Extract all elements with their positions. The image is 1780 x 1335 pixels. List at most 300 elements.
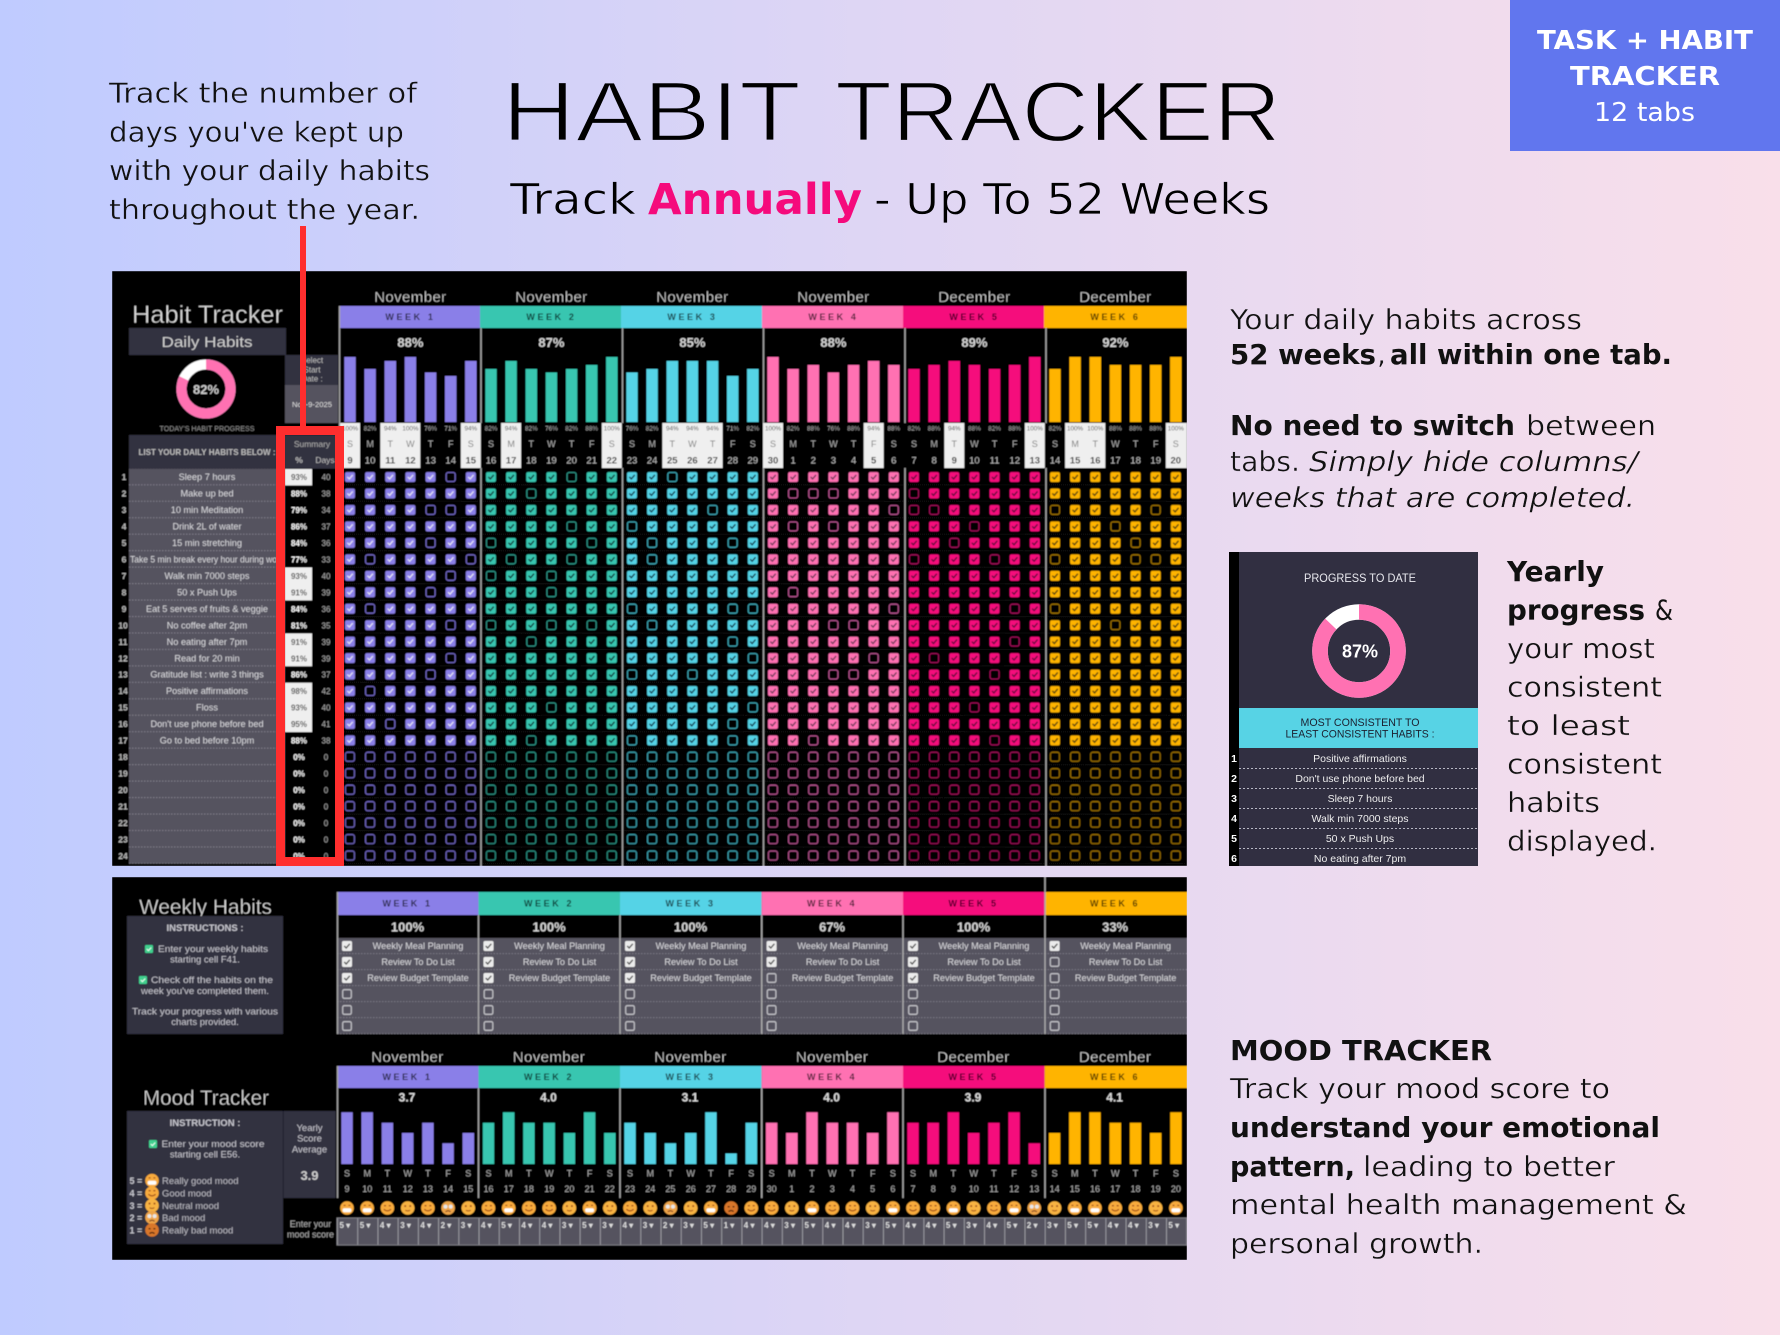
text block: no need to switch: weeks that are completed. bbox=[1230, 481, 1635, 514]
mood: week 2: 3 ▾ bbox=[602, 1221, 614, 1230]
week 3 column: 94% bbox=[686, 426, 699, 432]
badge: task + habit tracker: TRACKER bbox=[1570, 62, 1720, 92]
summary column: percent and days: 88% bbox=[291, 490, 307, 499]
weekly habits: week 5: WEEK 5 bbox=[948, 898, 999, 908]
mood: week 2: 18 bbox=[524, 1184, 534, 1194]
mood: week 1: 3 ▾ bbox=[400, 1221, 412, 1230]
week 2 column: 18 bbox=[526, 456, 537, 466]
weekly habits: week 5: Review To Do List bbox=[947, 957, 1021, 967]
instructions box: mood legend: Really good mood bbox=[162, 1176, 239, 1187]
mood: week 3: W bbox=[686, 1168, 695, 1178]
mood: week 3: T bbox=[708, 1168, 714, 1178]
week 1 column: S bbox=[347, 439, 353, 449]
ranked habit list: 6 bbox=[1231, 853, 1237, 865]
mood: week 6: 3 ▾ bbox=[1148, 1221, 1160, 1230]
summary column: percent and days: 36 bbox=[322, 605, 331, 614]
mood: week 2: 3 ▾ bbox=[562, 1221, 574, 1230]
text block: yearly progress: displayed. bbox=[1507, 824, 1657, 858]
week 4 column: 30 bbox=[768, 456, 778, 466]
habit name rows: 13 bbox=[118, 670, 128, 680]
weekly habits: week 3 bbox=[620, 892, 762, 1034]
panel: progress to date bbox=[1229, 552, 1478, 866]
summary column: percent and days: 86% bbox=[291, 671, 307, 680]
panel: weekly habits and mood tracker screenshot bbox=[112, 877, 1187, 1260]
week 4 column: 4 bbox=[851, 456, 856, 466]
week 2 column: 82% bbox=[565, 426, 578, 432]
week 3 column bbox=[621, 289, 763, 864]
summary header bbox=[285, 435, 338, 469]
mood: week 5: 8 bbox=[931, 1184, 936, 1194]
mood: week 4: F bbox=[870, 1168, 876, 1178]
yearly score average: Average bbox=[292, 1144, 327, 1156]
week 5 column: 88% bbox=[1008, 426, 1021, 432]
text block: mood tracker: understand your emotional bbox=[1230, 1111, 1660, 1144]
week 5 column: 89% bbox=[961, 335, 988, 350]
week 5 column: T bbox=[992, 439, 998, 449]
habit name rows: 14 bbox=[118, 686, 128, 696]
summary column: percent and days: 38 bbox=[322, 737, 331, 746]
mood: week 2: T bbox=[526, 1168, 532, 1178]
week 6 column: 14 bbox=[1050, 456, 1060, 466]
text block: 52 weeks: 52 weeks bbox=[1230, 338, 1376, 371]
week 1 column: 12 bbox=[405, 456, 416, 466]
mood: week 4: 4 ▾ bbox=[764, 1221, 776, 1230]
mood: week 2: S bbox=[485, 1168, 492, 1178]
weekly habits: week 5: Weekly Meal Planning bbox=[939, 941, 1029, 951]
text block: mood tracker: leading to better bbox=[1363, 1150, 1616, 1183]
mood: week 3: S bbox=[627, 1168, 633, 1178]
week 4 column: 76% bbox=[827, 426, 840, 432]
week 2 column: 94% bbox=[505, 426, 518, 432]
week 3 column: T bbox=[670, 439, 676, 449]
week 4 column: S bbox=[891, 439, 897, 449]
mood: week 1: 2 ▾ bbox=[441, 1221, 452, 1230]
week 3 column: November bbox=[656, 289, 729, 306]
donut: 87% bbox=[1320, 612, 1398, 690]
habit name rows: Gratitude list : write 3 things bbox=[150, 670, 264, 680]
summary column: percent and days: 88% bbox=[291, 737, 307, 746]
week 3 column: WEEK 3 bbox=[667, 312, 717, 322]
mood: week 6: S bbox=[1052, 1168, 1058, 1178]
callout: top left note: with your daily habits bbox=[109, 154, 430, 187]
week 2 column: 20 bbox=[566, 456, 577, 466]
week 2 column: T bbox=[569, 439, 575, 449]
mood: week 5: 5 ▾ bbox=[1007, 1221, 1018, 1230]
mood: week 1: 4 ▾ bbox=[420, 1221, 432, 1230]
week 1 column bbox=[339, 289, 481, 864]
weekly habits: week 1: Weekly Meal Planning bbox=[373, 941, 463, 951]
mood: week 1: 10 bbox=[362, 1184, 372, 1194]
ranked habit list: 1 bbox=[1231, 753, 1237, 765]
text block: mood tracker: mental health management & bbox=[1230, 1188, 1687, 1221]
mood: week 1: W bbox=[403, 1168, 412, 1178]
mood: week 3: S bbox=[748, 1168, 754, 1178]
weekly habits: week 6: 33% bbox=[1102, 920, 1129, 934]
weekly habits: week 3: Review Budget Template bbox=[650, 973, 752, 983]
weekly habits: week 2: WEEK 2 bbox=[524, 898, 574, 908]
text block: 52 weeks: all within one tab. bbox=[1390, 338, 1672, 371]
mood: week 3: T bbox=[668, 1168, 674, 1178]
week 3 column: 76% bbox=[626, 426, 639, 432]
week 4 column: 1 bbox=[790, 456, 796, 466]
habit name rows: 20 bbox=[118, 785, 128, 795]
week 4 column: F bbox=[871, 439, 877, 449]
mood: week 6: 5 ▾ bbox=[1067, 1221, 1079, 1230]
week 2 column: W bbox=[547, 439, 556, 449]
mood: week 6: T bbox=[1133, 1168, 1139, 1178]
yearly score average: mood score bbox=[287, 1230, 334, 1240]
week 6 column: 88% bbox=[1149, 426, 1162, 432]
mood: week 2: 21 bbox=[585, 1184, 595, 1194]
weekly habits: week 6: Weekly Meal Planning bbox=[1080, 941, 1171, 951]
subtitle bbox=[509, 175, 1270, 225]
week 6 column: 92% bbox=[1102, 335, 1129, 350]
ranked habit list bbox=[1231, 753, 1478, 865]
week 6 column bbox=[1044, 289, 1187, 864]
week 6 column: F bbox=[1153, 439, 1159, 449]
donut: 87%: 87% bbox=[1342, 642, 1378, 662]
mood: week 1: 4 ▾ bbox=[380, 1221, 392, 1230]
week 2 column: November bbox=[515, 289, 588, 306]
week 4 column: 2 bbox=[811, 456, 816, 466]
ranked habit list: 2 bbox=[1231, 773, 1237, 785]
summary column: percent and days: 95% bbox=[291, 720, 307, 729]
week 3 column: 24 bbox=[647, 456, 657, 466]
week 6 column: T bbox=[1093, 439, 1099, 449]
week 6 column: M bbox=[1071, 439, 1079, 449]
mood: week 5: 10 bbox=[969, 1184, 979, 1194]
ranked habit list: 4 bbox=[1231, 813, 1237, 825]
weekly habits: week 1: Review To Do List bbox=[381, 957, 455, 967]
week 1 column: W bbox=[406, 439, 415, 449]
mood: week 1 bbox=[337, 1049, 478, 1230]
mood: week 4: S bbox=[769, 1168, 775, 1178]
habit name rows: Don't use phone before bed bbox=[150, 719, 264, 729]
start date selector: Date : bbox=[301, 374, 323, 384]
mood: week 1: 9 bbox=[344, 1184, 350, 1194]
week 3 column: 27 bbox=[707, 456, 718, 466]
text block: yearly progress: habits bbox=[1507, 786, 1600, 819]
week 1 column: 10 bbox=[365, 456, 375, 466]
instructions box: weekly: starting cell F41. bbox=[170, 954, 240, 966]
mood: week 5: 5 ▾ bbox=[946, 1221, 958, 1230]
mood: week 6: 4 ▾ bbox=[1108, 1221, 1119, 1230]
week 5 column: 82% bbox=[908, 426, 921, 432]
mood: week 2: 16 bbox=[483, 1184, 494, 1194]
week 5 column: 94% bbox=[948, 426, 961, 432]
mood: week 5: 2 ▾ bbox=[1027, 1221, 1038, 1230]
habit name rows: 1 bbox=[122, 472, 127, 482]
week 6 column: S bbox=[1173, 439, 1179, 449]
mood: week 1: 5 ▾ bbox=[340, 1221, 351, 1230]
week 4 column: S bbox=[770, 439, 776, 449]
week 1 column: November bbox=[374, 289, 447, 306]
ranked habit list: Don't use phone before bed bbox=[1295, 773, 1425, 785]
mood: week 6: 19 bbox=[1151, 1184, 1161, 1194]
summary column: percent and days: 40 bbox=[322, 473, 331, 482]
mood: week 5: S bbox=[1031, 1168, 1037, 1178]
habit name rows: Walk min 7000 steps bbox=[165, 571, 250, 581]
week 4 column: 94% bbox=[867, 426, 880, 432]
weekly habits: week 6: Review Budget Template bbox=[1075, 973, 1176, 983]
mood: week 5: W bbox=[969, 1168, 978, 1178]
mood: week 4: 4.0 bbox=[823, 1090, 840, 1104]
summary column: percent and days: 38 bbox=[322, 490, 331, 499]
week 1 column: 100% bbox=[342, 426, 358, 432]
week 5 column: 88% bbox=[928, 426, 941, 432]
yearly score average: 3.9 bbox=[300, 1168, 319, 1183]
mood: week 5: 11 bbox=[989, 1184, 999, 1194]
start date selector: Nov-9-2025 bbox=[292, 400, 332, 409]
mood: week 4: 4 ▾ bbox=[825, 1221, 836, 1230]
mood: week 2: F bbox=[587, 1168, 593, 1178]
summary column: percent and days: 35 bbox=[322, 621, 331, 630]
week 1 column: WEEK 1 bbox=[385, 312, 435, 322]
week 5 column: 10 bbox=[969, 456, 980, 466]
summary column: percent and days: 0 bbox=[324, 753, 329, 762]
mood: week 1: 13 bbox=[423, 1184, 433, 1194]
week 3 column: 82% bbox=[746, 426, 759, 432]
weekly habits: week 4 bbox=[762, 892, 903, 1034]
summary column: percent and days: 0 bbox=[324, 852, 329, 861]
habit name rows: Read for 20 min bbox=[174, 653, 240, 663]
mood dropdown row bbox=[337, 1218, 1187, 1245]
mood: week 5: F bbox=[1011, 1168, 1017, 1178]
week 1 column: 13 bbox=[425, 456, 436, 466]
habit name rows: 7 bbox=[122, 571, 127, 581]
mood: week 1: 15 bbox=[463, 1184, 473, 1194]
summary column: percent and days: 81% bbox=[291, 621, 307, 630]
summary column: percent and days: 0% bbox=[293, 753, 305, 762]
habit name rows: 21 bbox=[118, 801, 128, 811]
week 4 column: W bbox=[829, 439, 838, 449]
summary header: Days bbox=[315, 455, 335, 465]
mood: week 6: 4.1 bbox=[1106, 1090, 1123, 1104]
weekly habits: week 2 bbox=[478, 892, 620, 1034]
text block: 52 weeks bbox=[1229, 303, 1672, 371]
donut: today's habit progress 82%: TODAY'S HABIT PROGRESS bbox=[160, 426, 255, 433]
heading: habit tracker: Habit Tracker bbox=[132, 301, 283, 329]
instructions box: mood legend: Enter your mood score bbox=[162, 1139, 264, 1150]
habit name rows: 9 bbox=[122, 604, 127, 614]
mood: week 3: 3 ▾ bbox=[643, 1221, 654, 1230]
week 1 column: 76% bbox=[424, 426, 437, 432]
weekly habits: week 4: Review Budget Template bbox=[792, 973, 893, 983]
text block: yearly progress: to least bbox=[1507, 709, 1630, 742]
mood: week 3: 4 ▾ bbox=[744, 1221, 755, 1230]
week 4 column: 3 bbox=[831, 456, 836, 466]
mood: week 2: 4 ▾ bbox=[481, 1221, 493, 1230]
instructions box: mood legend: starting cell E56. bbox=[170, 1150, 240, 1160]
mood: week 2: M bbox=[505, 1168, 512, 1178]
week 3 column: S bbox=[629, 439, 635, 449]
weekly habits: week 2: Weekly Meal Planning bbox=[514, 941, 605, 951]
summary column: percent and days: 84% bbox=[291, 539, 307, 548]
week 1 column: M bbox=[366, 439, 374, 449]
week 2 column: 16 bbox=[486, 456, 496, 466]
mood: week 2: T bbox=[567, 1168, 573, 1178]
title: TRACKER bbox=[835, 65, 1281, 160]
week 2 column: WEEK 2 bbox=[526, 312, 576, 322]
week 5 column: F bbox=[1012, 439, 1018, 449]
habit name rows: 10 bbox=[118, 620, 128, 630]
mood: week 2 bbox=[478, 1049, 620, 1230]
mood: week 3: 25 bbox=[665, 1184, 675, 1194]
mood: week 3: 27 bbox=[706, 1184, 716, 1194]
mood: week 6: T bbox=[1092, 1168, 1098, 1178]
instructions box: weekly: charts provided. bbox=[171, 1017, 239, 1028]
week 1 column: 11 bbox=[385, 456, 396, 466]
subtitle: - Up To 52 Weeks bbox=[874, 175, 1270, 225]
heading: daily habits bbox=[129, 328, 286, 355]
mood: week 3: 3 ▾ bbox=[683, 1221, 695, 1230]
text block: 52 weeks: , bbox=[1377, 338, 1386, 371]
mood: week 5: T bbox=[991, 1168, 997, 1178]
week 1 column: T bbox=[428, 439, 434, 449]
callout: top left note: Track the number of bbox=[108, 77, 418, 110]
title: HABIT bbox=[502, 65, 801, 160]
mood: week 4: T bbox=[809, 1168, 815, 1178]
text block: 52 weeks: Your daily habits across bbox=[1229, 303, 1582, 336]
heading: mood tracker: Mood Tracker bbox=[143, 1087, 269, 1110]
week 6 column: December bbox=[1079, 289, 1152, 306]
mood: week 1: T bbox=[425, 1168, 431, 1178]
week 5 column: 7 bbox=[911, 456, 917, 466]
instructions box: mood legend: 3 = bbox=[130, 1201, 142, 1211]
donut: today's habit progress 82%: 82% bbox=[193, 382, 219, 397]
week 2 column: 87% bbox=[538, 335, 565, 350]
mood: week 2: 4 ▾ bbox=[521, 1221, 533, 1230]
mood: week 1: November bbox=[371, 1049, 444, 1066]
week 6 column: W bbox=[1111, 439, 1120, 449]
mood: week 4: M bbox=[788, 1168, 796, 1178]
mood: week 5 bbox=[903, 1049, 1044, 1230]
mood: week 2: 5 ▾ bbox=[501, 1221, 513, 1230]
mood: week 5: 4 ▾ bbox=[906, 1221, 917, 1230]
week 6 column: 20 bbox=[1171, 456, 1181, 466]
instructions box: mood legend: Good mood bbox=[162, 1188, 212, 1200]
weekly habits: week 4: Weekly Meal Planning bbox=[797, 941, 888, 951]
habit name rows bbox=[118, 469, 285, 864]
week 1 column: 14 bbox=[445, 456, 456, 466]
mood: week 6: 20 bbox=[1171, 1184, 1181, 1194]
week 5 column: 8 bbox=[931, 456, 937, 466]
habit name rows: Go to bed before 10pm bbox=[160, 736, 255, 746]
weekly habits: week 6: WEEK 6 bbox=[1090, 898, 1140, 908]
mood: week 5: December bbox=[937, 1049, 1010, 1066]
week 4 column: November bbox=[797, 289, 870, 306]
habit name rows: 16 bbox=[118, 719, 128, 729]
week 6 column: 82% bbox=[1049, 426, 1062, 432]
mood: week 4: 4 bbox=[850, 1184, 855, 1194]
mood: week 3: November bbox=[654, 1049, 727, 1066]
summary column: percent and days: 41 bbox=[322, 720, 331, 729]
instructions box: mood legend: Bad mood bbox=[162, 1213, 205, 1224]
mood: week 2: WEEK 2 bbox=[524, 1072, 574, 1082]
week 6 column: 15 bbox=[1070, 456, 1081, 466]
week 5 column: 88% bbox=[968, 426, 981, 432]
week 3 column: F bbox=[730, 439, 736, 449]
weekly habits: week 5: Review Budget Template bbox=[933, 973, 1035, 983]
mood: week 4: 5 ▾ bbox=[804, 1221, 816, 1230]
week 2 column: 19 bbox=[546, 456, 557, 466]
mood: week 2: 17 bbox=[504, 1184, 514, 1194]
instructions box: mood legend: 4 = bbox=[130, 1188, 142, 1198]
summary column: percent and days: 0 bbox=[324, 819, 329, 828]
mood: week 4: S bbox=[890, 1168, 896, 1178]
week 3 column: 94% bbox=[666, 426, 679, 432]
weekly habits: week 4: 67% bbox=[819, 920, 846, 934]
start date selector: Start bbox=[304, 366, 321, 374]
mood: week 6: F bbox=[1153, 1168, 1159, 1178]
text block: yearly progress: progress bbox=[1507, 594, 1645, 626]
mood: week 6: S bbox=[1173, 1168, 1179, 1178]
yearly score average: Score bbox=[297, 1134, 322, 1144]
callout: top left note: throughout the year. bbox=[109, 193, 420, 226]
habit name rows: 15 bbox=[118, 703, 128, 713]
mood: week 5: 4 ▾ bbox=[926, 1221, 937, 1230]
summary column: percent and days: 0% bbox=[293, 835, 305, 844]
week 6 column: 100% bbox=[1087, 426, 1104, 432]
instructions box: mood legend: 5 = bbox=[130, 1176, 142, 1186]
week 1 column: 94% bbox=[464, 426, 477, 432]
text block: mood tracker: MOOD TRACKER bbox=[1230, 1034, 1492, 1067]
week 6 column: 16 bbox=[1090, 456, 1101, 466]
week 6 column: 100% bbox=[1168, 426, 1184, 432]
mood: week 2: November bbox=[513, 1049, 585, 1066]
week 3 column: 26 bbox=[687, 456, 698, 466]
banner: most consistent: MOST CONSISTENT TO bbox=[1300, 717, 1420, 729]
week 2 column: 100% bbox=[604, 426, 620, 432]
week 2 column: 17 bbox=[506, 456, 516, 466]
mood: week 5: 9 bbox=[951, 1184, 956, 1194]
text block: no need to switch: No need to switch bbox=[1230, 409, 1515, 442]
summary column: percent and days: 39 bbox=[322, 638, 331, 647]
mood: week 2: 4.0 bbox=[540, 1090, 557, 1104]
habit name rows: 3 bbox=[122, 505, 127, 515]
mood: week 3: WEEK 3 bbox=[665, 1072, 716, 1082]
mood: week 5: T bbox=[951, 1168, 957, 1178]
weekly habits: week 5 bbox=[903, 892, 1044, 1034]
weekly habits: week 2: Review Budget Template bbox=[509, 973, 610, 983]
week 2 column: 22 bbox=[607, 456, 617, 466]
mood: week 4 bbox=[762, 1049, 903, 1230]
mood: week 1: 5 ▾ bbox=[360, 1221, 371, 1230]
summary column: percent and days: 0 bbox=[324, 802, 329, 811]
mood: week 4: 3 bbox=[830, 1184, 835, 1194]
text block: no need to switch: tabs. bbox=[1230, 445, 1300, 478]
habit name rows: 2 bbox=[122, 489, 127, 499]
mood: week 5: 3.9 bbox=[965, 1090, 982, 1104]
text block: no need to switch bbox=[1230, 409, 1656, 514]
week 3 column: W bbox=[688, 439, 697, 449]
mood: week 4: 1 bbox=[789, 1184, 794, 1194]
habit name rows: 24 bbox=[118, 851, 128, 861]
yearly score average: Yearly bbox=[296, 1123, 323, 1134]
mood: week 3 bbox=[620, 1049, 762, 1230]
week 1 column: 88% bbox=[397, 335, 424, 350]
week 1 column: 82% bbox=[364, 426, 377, 432]
week 6 column: 88% bbox=[1109, 426, 1122, 432]
mood: week 3: F bbox=[728, 1168, 734, 1178]
summary column: percent and days: 42 bbox=[322, 687, 331, 696]
badge: task + habit tracker: 12 tabs bbox=[1594, 98, 1695, 128]
week 2 column bbox=[480, 289, 622, 864]
habit name rows: No eating after 7pm bbox=[167, 637, 248, 647]
week 3 column: T bbox=[710, 439, 716, 449]
summary column: percent and days: 37 bbox=[322, 523, 331, 532]
summary column: percent and days: 0% bbox=[293, 802, 305, 811]
